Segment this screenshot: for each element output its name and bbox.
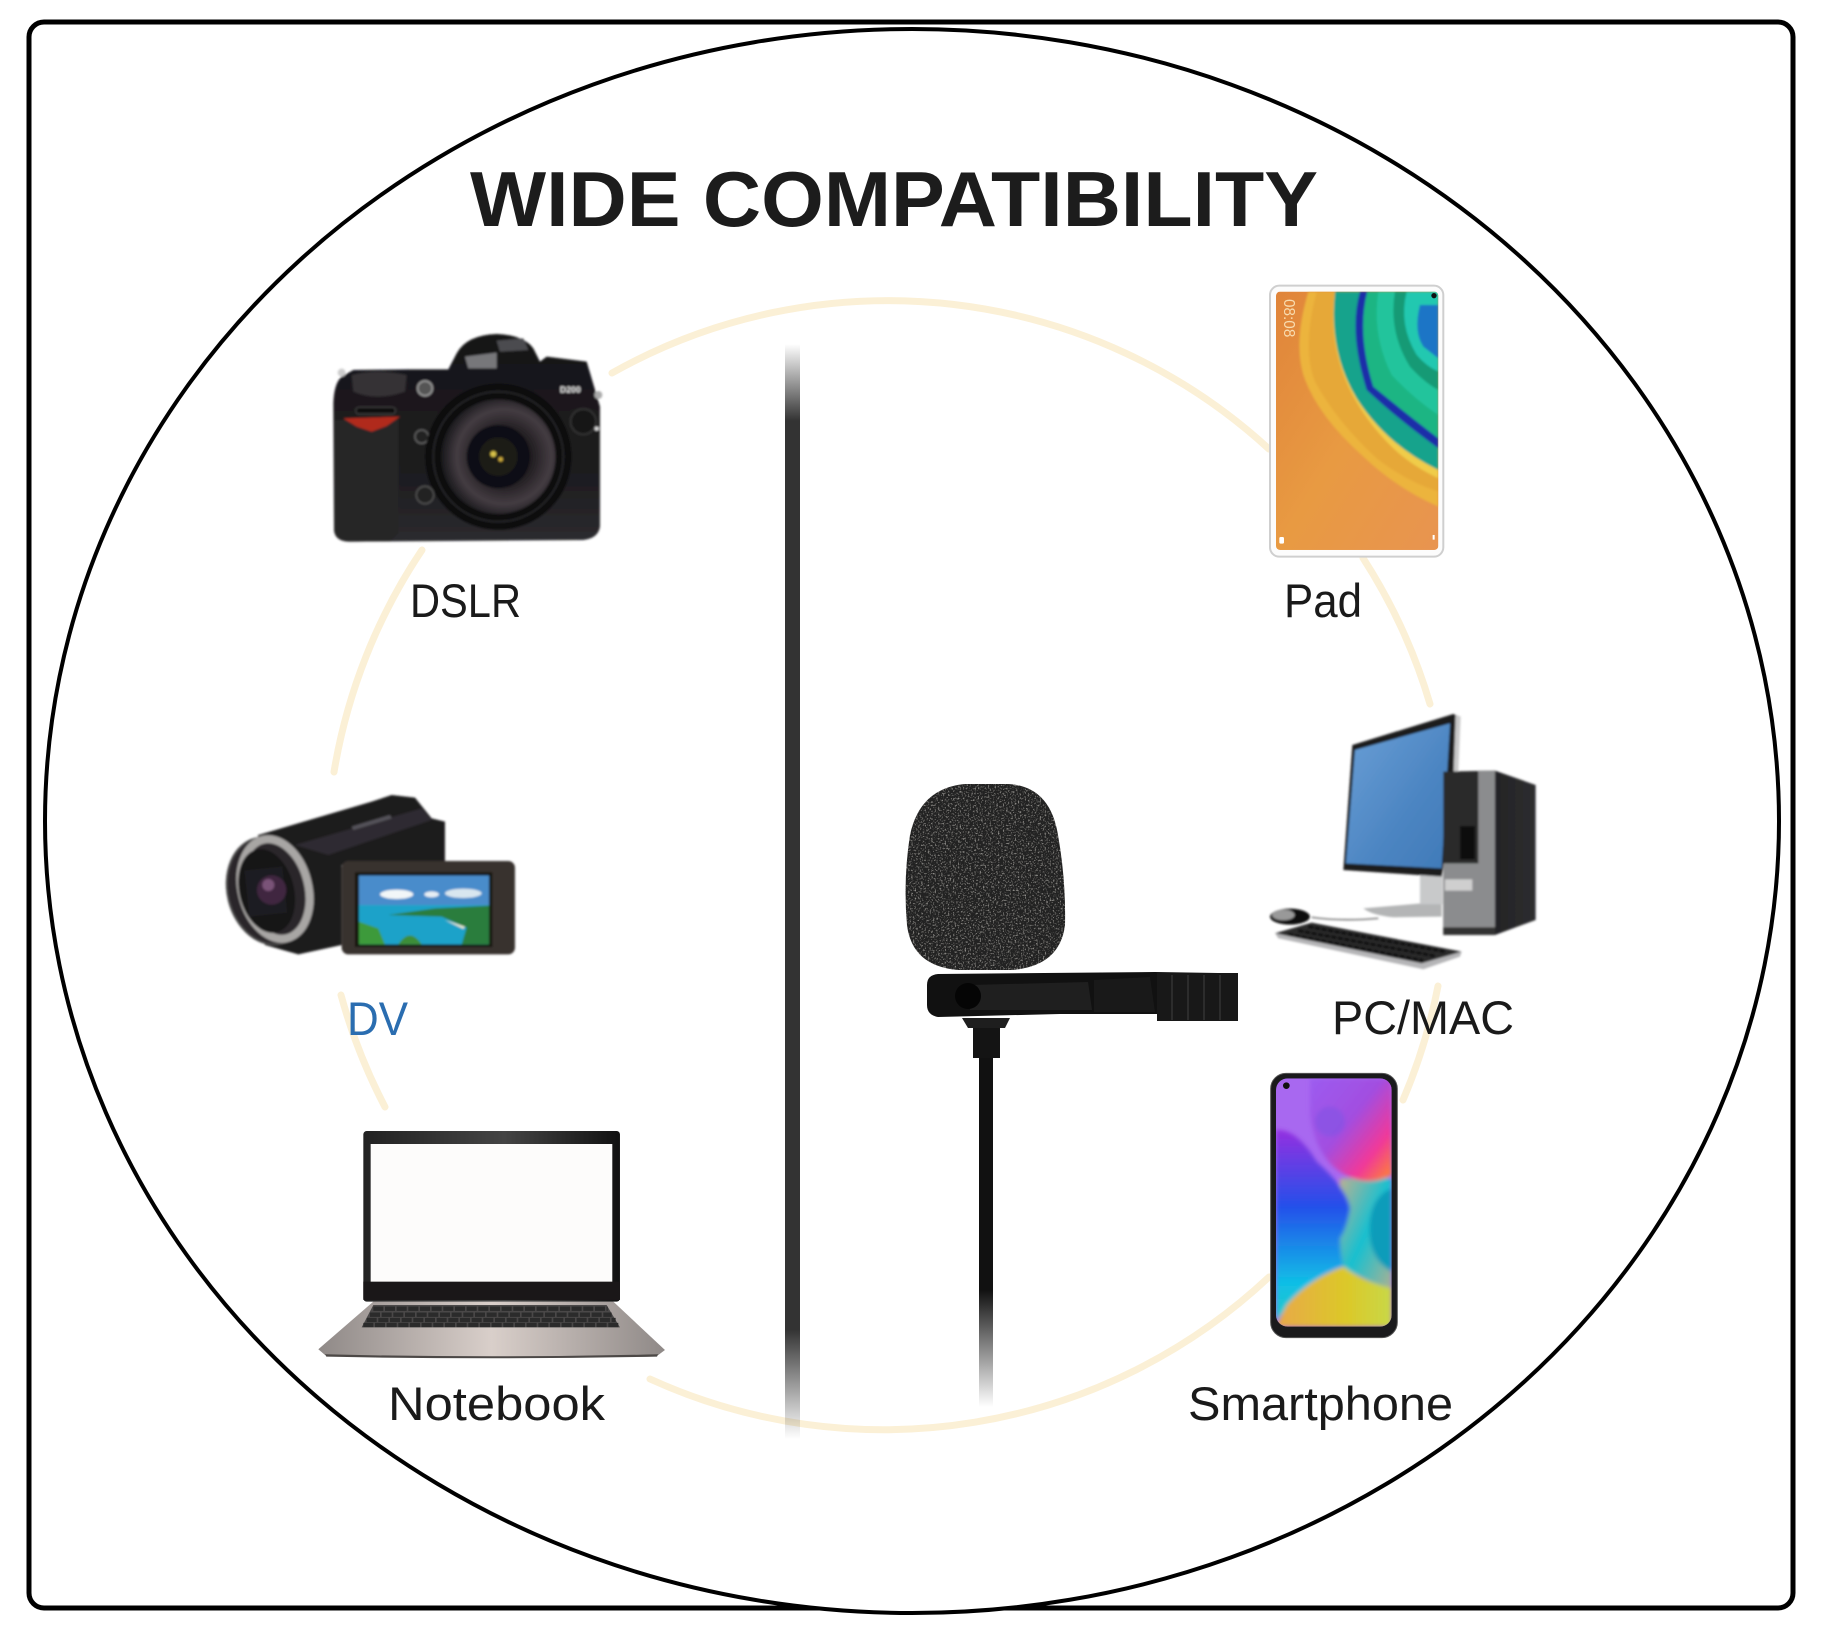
lavalier microphone: [906, 784, 1238, 1407]
model badge: D200: [560, 385, 581, 395]
title: WIDE COMPATIBILITY: [470, 155, 1318, 243]
icon: notebook laptop: [318, 1131, 665, 1358]
label: DSLR: DSLR: [410, 574, 521, 627]
foam windscreen: [906, 784, 1065, 970]
tablet clock: 08:08: [1280, 299, 1297, 337]
icon: tablet pad: [1270, 286, 1443, 557]
icon: camcorder: [216, 795, 515, 954]
vertical divider cable: [785, 344, 800, 1439]
cable: [979, 1050, 993, 1407]
label: Notebook: Notebook: [388, 1377, 606, 1430]
clip: [927, 972, 1238, 1021]
icon: DSLR camera: [333, 334, 602, 542]
icon: desktop computer: [1270, 714, 1536, 969]
pale yellow connection ring: [334, 301, 1438, 1430]
label: Pad: Pad: [1284, 574, 1362, 627]
label: PC/MAC: PC/MAC: [1332, 991, 1514, 1044]
label: Smartphone: Smartphone: [1188, 1377, 1453, 1430]
icon: smartphone: [1271, 1073, 1397, 1338]
label: DV: DV: [347, 992, 409, 1045]
